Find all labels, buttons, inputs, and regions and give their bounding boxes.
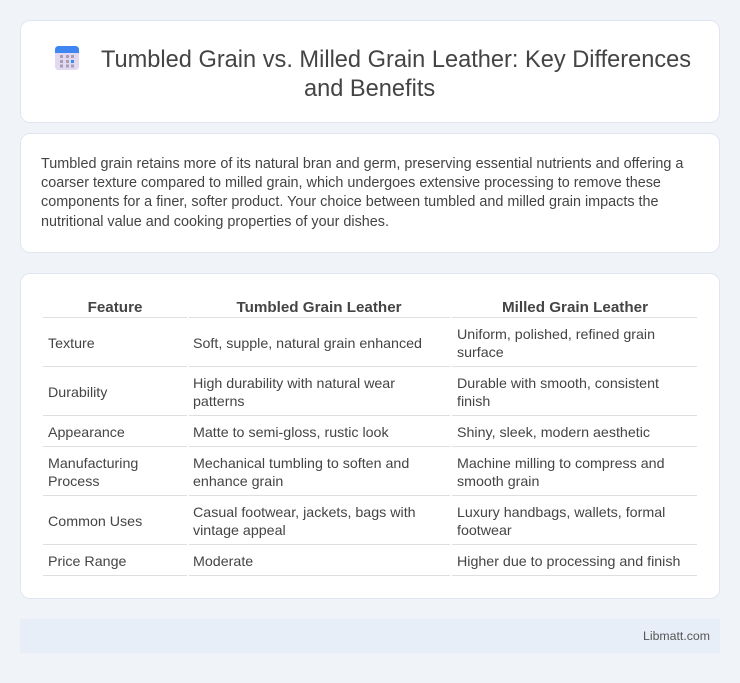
comparison table card: enhance grain (193, 474, 283, 490)
row: Texture: Texture (48, 336, 95, 352)
comparison table card: Mechanical tumbling to soften and (193, 456, 409, 472)
comparison table card (20, 273, 720, 599)
intro text: nutritional value and cooking properties of your dishes. (41, 214, 389, 230)
title: Tumbled Grain vs. Milled Grain Leather: Key Differences (101, 47, 691, 73)
comparison table card: Durable with smooth, consistent (457, 376, 659, 392)
comparison table card: finish (457, 394, 490, 410)
comparison table card: footwear (457, 523, 512, 539)
comparison table card: surface (457, 345, 504, 361)
icon: calendar grid (55, 46, 79, 70)
footer bar (20, 619, 720, 653)
row: Appearance: Appearance (48, 425, 125, 441)
title (101, 47, 691, 102)
row: Manufacturing Process: Process (48, 474, 99, 490)
comparison table card: smooth grain (457, 474, 539, 490)
intro text: components for a finer, softer product. Your choice between tumbled and milled grain impacts the (41, 194, 659, 210)
comparison table card: Soft, supple, natural grain enhanced (193, 336, 422, 352)
title: and Benefits (304, 76, 435, 102)
comparison table card: Shiny, sleek, modern aesthetic (457, 425, 650, 441)
intro text: coarser texture compared to milled grain, which undergoes extensive processing to remove these (41, 175, 661, 191)
table header: Feature: Feature (88, 299, 142, 316)
table header: Tumbled Grain Leather: Tumbled Grain Leather (236, 299, 402, 316)
comparison table card: Machine milling to compress and (457, 456, 665, 472)
comparison table card: Matte to semi-gloss, rustic look (193, 425, 389, 441)
row: Manufacturing Process (48, 456, 138, 490)
comparison table card: vintage appeal (193, 523, 286, 539)
title card (20, 20, 720, 123)
row: Manufacturing Process: Manufacturing (48, 456, 138, 472)
comparison table card: Moderate (193, 554, 253, 570)
row: Common Uses: Common Uses (48, 514, 142, 530)
comparison table card: patterns (193, 394, 244, 410)
footer text: Libmatt.com (643, 629, 710, 643)
intro text (41, 156, 684, 230)
comparison table card: Higher due to processing and finish (457, 554, 680, 570)
row: Price Range: Price Range (48, 554, 126, 570)
row: Durability: Durability (48, 385, 107, 401)
intro text: Tumbled grain retains more of its natural bran and germ, preserving essential nutrients and offering a (41, 156, 683, 172)
comparison table card: Luxury handbags, wallets, formal (457, 505, 665, 521)
intro card (20, 133, 720, 253)
comparison table card: Uniform, polished, refined grain (457, 327, 655, 343)
table header: Milled Grain Leather: Milled Grain Leather (502, 299, 648, 316)
comparison table card: Casual footwear, jackets, bags with (193, 505, 416, 521)
comparison table card: High durability with natural wear (193, 376, 395, 392)
